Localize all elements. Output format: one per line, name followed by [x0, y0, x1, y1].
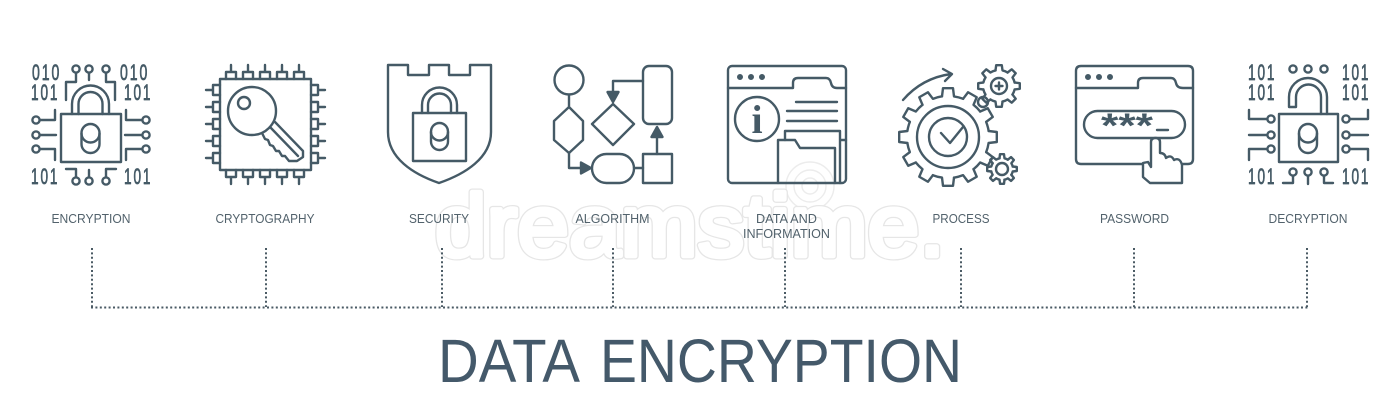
icon: decryption: 101: [1248, 80, 1276, 105]
icon: encryption: 010: [120, 60, 149, 85]
label: algorithm: ALGORITHM: [576, 211, 650, 226]
icon: encryption: 101: [124, 164, 152, 189]
dotted connector lines: [91, 248, 1308, 308]
icon: algorithm: [554, 66, 672, 183]
label: encryption: ENCRYPTION: [52, 211, 130, 226]
watermark: dreamstime.: [435, 176, 945, 275]
icon: decryption: 101: [1342, 80, 1370, 105]
icon: password: ***: [1101, 107, 1154, 145]
title: [438, 327, 962, 395]
icon: decryption: 101: [1342, 60, 1370, 85]
label: data and information: [743, 211, 830, 241]
label: decryption: DECRYPTION: [1268, 211, 1348, 226]
label: process: PROCESS: [932, 211, 990, 226]
watermark: dreamstime.: [435, 176, 945, 275]
icon: encryption: [31, 60, 152, 189]
icon: decryption: 101: [1248, 164, 1276, 189]
title: DATA: [438, 327, 580, 395]
icon: decryption: [1248, 60, 1370, 189]
icon: data and information: i: [751, 97, 763, 142]
icon: password: [1076, 66, 1193, 183]
label: data and information: INFORMATION: [743, 226, 830, 241]
icon: encryption: 101: [31, 80, 59, 105]
icon: security: [388, 65, 491, 183]
icon: encryption: 101: [124, 80, 152, 105]
icon: encryption: 010: [32, 60, 61, 85]
icon: encryption: 101: [31, 164, 59, 189]
title: ENCRYPTION: [600, 327, 962, 395]
icon: process: [898, 65, 1020, 187]
label: cryptography: CRYPTOGRAPHY: [216, 211, 315, 226]
label: data and information: DATA AND: [756, 211, 817, 226]
icon: cryptography: [206, 65, 325, 184]
label: security: SECURITY: [409, 211, 469, 226]
icon: decryption: 101: [1248, 60, 1276, 85]
icon: decryption: 101: [1342, 164, 1370, 189]
icon: data and information: [728, 66, 846, 183]
label: password: PASSWORD: [1100, 211, 1169, 226]
